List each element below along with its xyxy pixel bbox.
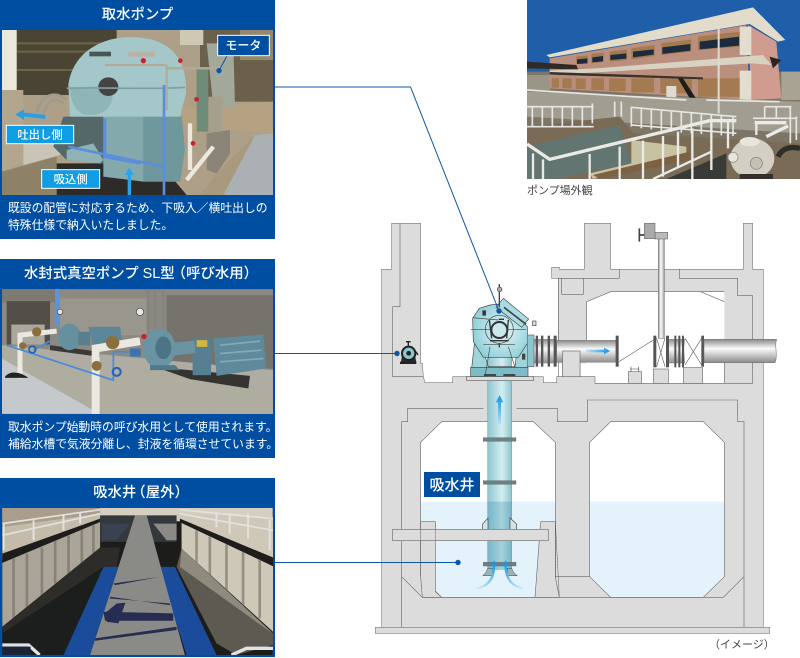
heading: intake pump: 取水ポンプ <box>102 7 173 23</box>
photo: intake pump: モータ <box>225 39 261 53</box>
photo: suction well <box>2 508 273 655</box>
text: vacuum pump description: 補給水槽で気液分離し、封液を循環させています。 <box>8 436 278 450</box>
text: intake pump description <box>8 201 268 232</box>
suction column pipe <box>393 315 548 589</box>
discharge piping <box>496 223 777 425</box>
building structure <box>382 223 763 627</box>
wells and water <box>375 422 770 633</box>
photo: intake pump: 吸込側 <box>54 173 88 186</box>
photo: intake pump <box>2 30 273 195</box>
panel: intake pump <box>0 0 275 239</box>
heading: suction well: 吸水井（屋外） <box>93 485 189 501</box>
panel: vacuum pump <box>0 259 275 458</box>
label: suction well <box>424 472 480 497</box>
small vacuum pump icon <box>400 342 418 364</box>
photo: pump station exterior <box>527 0 800 179</box>
label: suction well: 吸水井 <box>429 477 475 494</box>
photo: vacuum pump <box>2 289 273 414</box>
heading: vacuum pump: 水封式真空ポンプ SL型 （呼び水用） <box>24 266 258 282</box>
note: image only: （イメージ） <box>709 639 775 651</box>
photo: intake pump: 吐出し側 <box>17 128 63 141</box>
panel: suction well <box>0 478 275 657</box>
leader line: suction well <box>275 560 461 565</box>
leader line: vacuum pump <box>275 351 400 356</box>
intake pump <box>467 284 536 381</box>
diagram: pump station cross-section <box>275 86 777 634</box>
text: intake pump description: 既設の配管に対応するため、下吸入／横吐出しの <box>8 201 268 215</box>
caption: pump station exterior: ポンプ場外観 <box>527 185 593 197</box>
text: vacuum pump description: 取水ポンプ始動時の呼び水用として使用されます。 <box>8 420 277 434</box>
text: intake pump description: 特殊仕様で納入いたしました。 <box>8 218 173 232</box>
text: vacuum pump description <box>8 420 278 450</box>
leader line: intake pump <box>275 87 502 314</box>
